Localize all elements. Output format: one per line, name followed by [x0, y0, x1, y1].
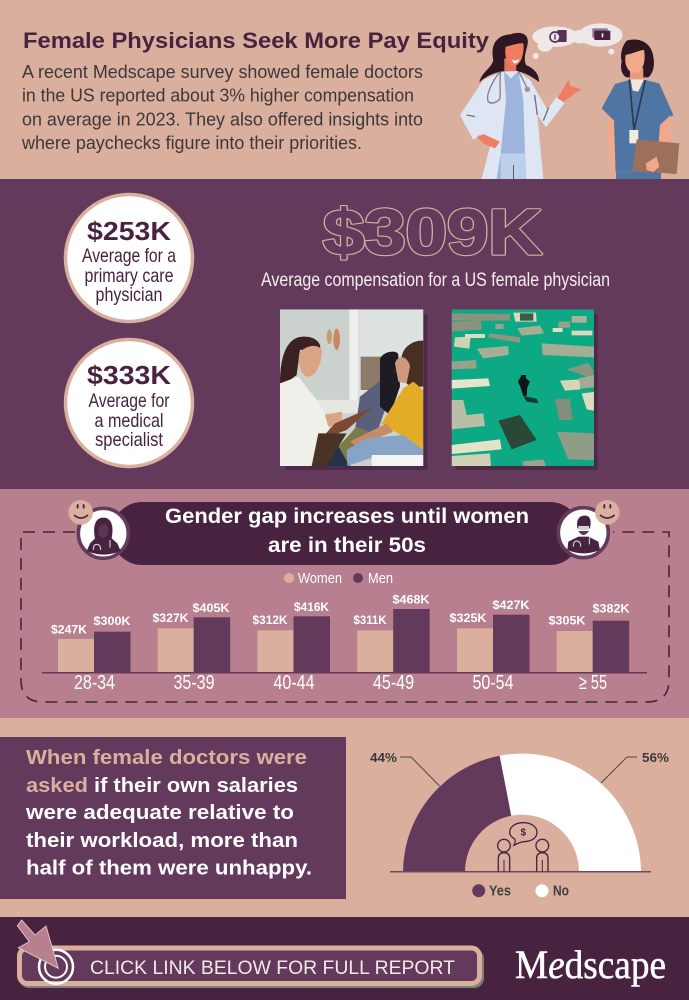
text block: salary adequacy question	[0, 737, 346, 899]
heading pill: Gender gap increases until women	[165, 505, 529, 528]
icon: male doctor avatar	[558, 500, 620, 558]
figure: doctor	[460, 33, 582, 179]
bar chart: compensation by age and gender: $300K	[94, 616, 131, 628]
bar chart: compensation by age and gender: $327K	[152, 613, 189, 625]
caption: average compensation: Average compensation for a US female physician	[261, 270, 610, 291]
bar chart: compensation by age and gender: $247K	[51, 625, 88, 637]
bar chart: compensation by age and gender	[42, 595, 647, 694]
text block: salary adequacy question: When female doctors were	[26, 746, 307, 769]
label: 56%	[601, 750, 669, 783]
bar chart: compensation by age and gender: $427K	[492, 600, 530, 612]
panel: header	[0, 0, 689, 180]
callout: primary care average: Average for a	[82, 245, 176, 267]
bar chart: compensation by age and gender: $468K	[392, 595, 430, 607]
bar chart: compensation by age and gender: 28-34	[74, 672, 115, 694]
panel: salary adequacy	[0, 718, 689, 917]
icon: two people talking about money: $	[521, 828, 527, 839]
panel: gender gap chart	[0, 489, 689, 718]
title: Female Physicians Seek More Pay Equity	[23, 28, 490, 53]
bar chart: compensation by age and gender: $416K	[294, 602, 330, 614]
callout: primary care average: physician	[96, 284, 162, 306]
bar chart: compensation by age and gender: 40-44	[274, 672, 314, 694]
intro text: where paychecks figure into their priorities.	[21, 132, 362, 153]
callout: primary care average	[66, 194, 192, 322]
heading pill	[112, 502, 580, 565]
callout: medical specialist average: a medical	[94, 410, 164, 432]
chart legend: Men	[368, 570, 393, 587]
text block: salary adequacy question: their workload, more than	[26, 829, 298, 852]
bar chart: compensation by age and gender: $312K	[252, 615, 288, 627]
bar chart: compensation by age and gender: 45-49	[373, 672, 414, 694]
big number: $309K: $309K	[323, 196, 542, 268]
arrow: pointing at click target	[17, 920, 58, 968]
chart legend: No	[553, 883, 569, 900]
chart legend: Women	[298, 570, 342, 587]
text block: salary adequacy question: half of them were unhappy.	[26, 856, 312, 880]
bar chart: compensation by age and gender: $311K	[354, 615, 387, 627]
intro text: on average in 2023. They also offered insights into	[22, 108, 423, 130]
heading pill: are in their 50s	[268, 534, 426, 557]
text block: salary adequacy question: were adequate relative to	[25, 801, 294, 824]
intro text	[21, 61, 423, 153]
callout: medical specialist average: $333K	[87, 360, 171, 390]
panel: average compensation	[0, 179, 689, 489]
illustration: doctor and nurse with thought bubbles	[460, 23, 679, 179]
photo: doctor with patients	[280, 309, 427, 470]
intro text: in the US reported about 3% higher compensation	[22, 84, 414, 106]
big number: $309K: $309K	[323, 196, 542, 268]
icon: thought bubbles about money	[532, 23, 623, 59]
chart legend	[284, 570, 393, 587]
bar chart: compensation by age and gender: 50-54	[472, 672, 514, 694]
logo: Medscape: Medscape	[515, 942, 666, 987]
bar chart: compensation by age and gender: $325K	[450, 613, 487, 625]
bar chart: compensation by age and gender: $305K	[548, 616, 586, 628]
bar chart: compensation by age and gender: ≥ 55	[579, 672, 607, 694]
bar chart: compensation by age and gender: $382K	[592, 604, 630, 616]
icon: click target	[39, 950, 73, 984]
photo: figure among scattered dollar bills	[452, 309, 598, 470]
button: click link for full report: CLICK LINK BELOW FOR FULL REPORT	[90, 957, 455, 979]
chart legend: Yes	[489, 883, 511, 900]
callout: medical specialist average	[66, 340, 192, 466]
text block: salary adequacy question: asked if their own salaries	[26, 774, 298, 797]
chart legend	[472, 883, 569, 900]
bar chart: compensation by age and gender: $405K	[192, 603, 230, 615]
button: click link for full report	[19, 948, 484, 988]
label: 44%	[370, 750, 440, 786]
callout: primary care average: $253K	[87, 216, 171, 246]
icon: two people talking about money	[498, 823, 549, 872]
callout: medical specialist average: Average for	[88, 390, 170, 412]
semicircle chart: 44% yes, 56% no	[370, 750, 669, 900]
panel: footer	[0, 917, 689, 1000]
callout: medical specialist average: specialist	[95, 429, 163, 451]
label: 56%: 56%	[642, 750, 669, 765]
bar chart: compensation by age and gender: 35-39	[174, 672, 214, 694]
intro text: A recent Medscape survey showed female doctors	[22, 61, 423, 82]
figure: nurse	[602, 40, 679, 179]
callout: primary care average: primary care	[84, 265, 174, 287]
icon: female doctor avatar	[68, 500, 128, 558]
label: 44%: 44%	[370, 750, 397, 765]
